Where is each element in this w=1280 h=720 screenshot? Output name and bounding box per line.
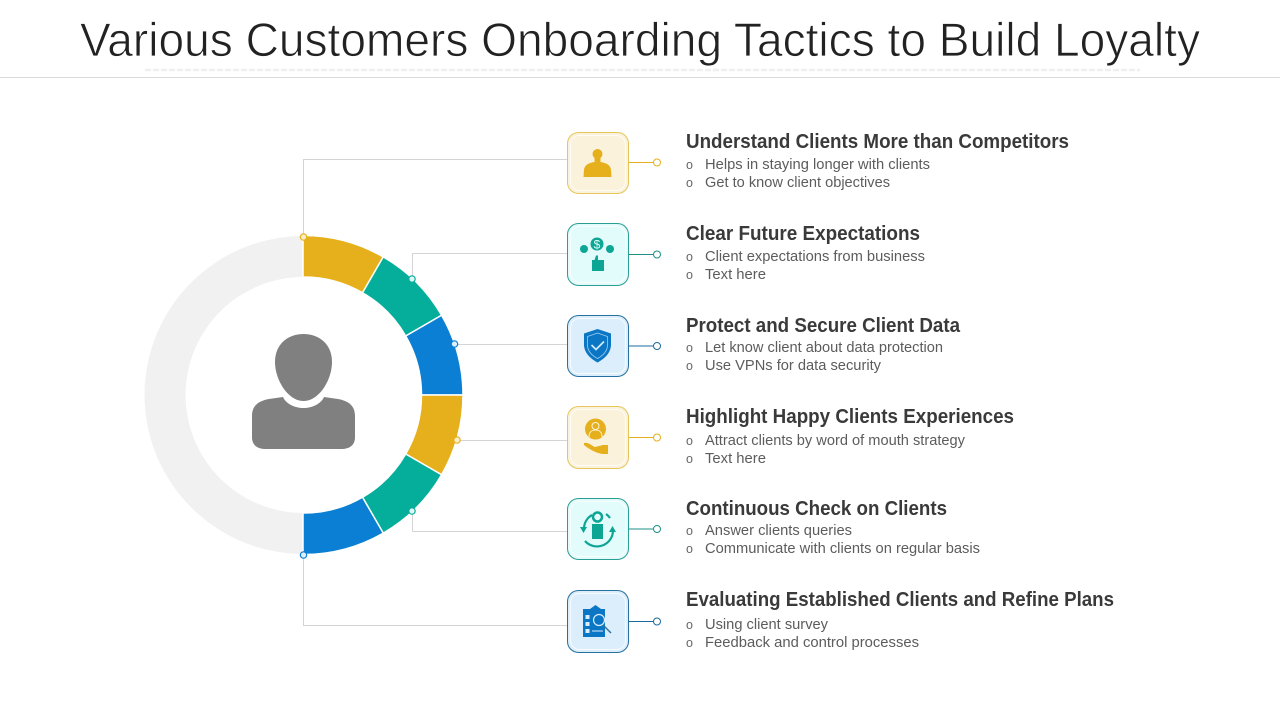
bullet list: Attract clients by word of mouth strategy [705, 433, 966, 449]
bullet list: Text here [705, 267, 766, 283]
bullet list: o [686, 636, 693, 650]
connector: stem and dot [629, 526, 660, 532]
bullet list [686, 433, 966, 467]
icon box: money and thumbs up [568, 224, 628, 286]
bullet list: o [686, 268, 693, 282]
bullet list: o [686, 524, 693, 538]
bullet list [686, 249, 925, 283]
bullet list: Communicate with clients on regular basis [705, 541, 980, 557]
connector: stem and dot [629, 159, 660, 166]
heading: Clear Future Expectations [686, 223, 920, 245]
connector: stem and dot [629, 251, 660, 258]
bullet list: Using client survey [705, 617, 829, 633]
bullet list [686, 617, 919, 651]
bullet list: o [686, 250, 693, 264]
item 6 [568, 589, 1114, 652]
heading: Protect and Secure Client Data [686, 315, 961, 337]
connector: stem and dot [629, 434, 660, 441]
bullet list: Use VPNs for data security [705, 358, 882, 374]
item 2 [568, 223, 925, 286]
item 3 [568, 315, 961, 376]
bullet list: o [686, 158, 693, 172]
connector: stem and dot [629, 618, 660, 625]
icon box: clipboard and magnifier [568, 590, 628, 652]
segment: yellow top [303, 235, 383, 293]
bullet list: Get to know client objectives [705, 175, 890, 191]
item 1 [568, 131, 1069, 194]
bullet list [686, 340, 943, 374]
bullet list: Helps in staying longer with clients [705, 157, 930, 173]
bullet list: o [686, 359, 693, 373]
bullet list [686, 157, 930, 191]
bullet list: o [686, 434, 693, 448]
bullet list: o [686, 452, 693, 466]
bullet list: Feedback and control processes [705, 635, 919, 651]
bullet list: o [686, 542, 693, 556]
bullet list: Client expectations from business [705, 249, 925, 265]
ring track [145, 236, 304, 554]
bullet list [686, 523, 980, 557]
heading: Evaluating Established Clients and Refine Plans [686, 589, 1114, 611]
segment: teal upper [362, 257, 442, 336]
bullet list: Let know client about data protection [705, 340, 943, 356]
segment: blue upper [406, 315, 463, 395]
bullet list: o [686, 618, 693, 632]
icon box: continuous cycle [568, 498, 628, 560]
heading: Understand Clients More than Competitors [686, 131, 1069, 153]
bullet list: Text here [705, 451, 766, 467]
icon box: shield [568, 316, 628, 376]
bullet list: o [686, 341, 693, 355]
bullet list: o [686, 176, 693, 190]
segment: blue bottom [303, 497, 383, 555]
heading: Highlight Happy Clients Experiences [686, 406, 1014, 428]
title: Various Customers Onboarding Tactics to Build Loyalty [80, 13, 1200, 66]
item 5 [568, 498, 980, 560]
segment: yellow lower [406, 395, 463, 475]
icon box: client in hand [568, 406, 628, 468]
icon box: money and thumbs up: $ [594, 238, 601, 252]
connector lines from ring to icons [304, 160, 567, 626]
bullet list: Answer clients queries [705, 523, 852, 539]
icon box: person [568, 132, 628, 194]
heading: Continuous Check on Clients [686, 498, 947, 520]
connector: stem and dot [629, 342, 660, 350]
icon: central person [252, 334, 355, 449]
segment: teal lower [362, 454, 442, 533]
donut chart [145, 235, 463, 555]
ring connector dots [300, 234, 460, 558]
item 4 [568, 406, 1014, 468]
